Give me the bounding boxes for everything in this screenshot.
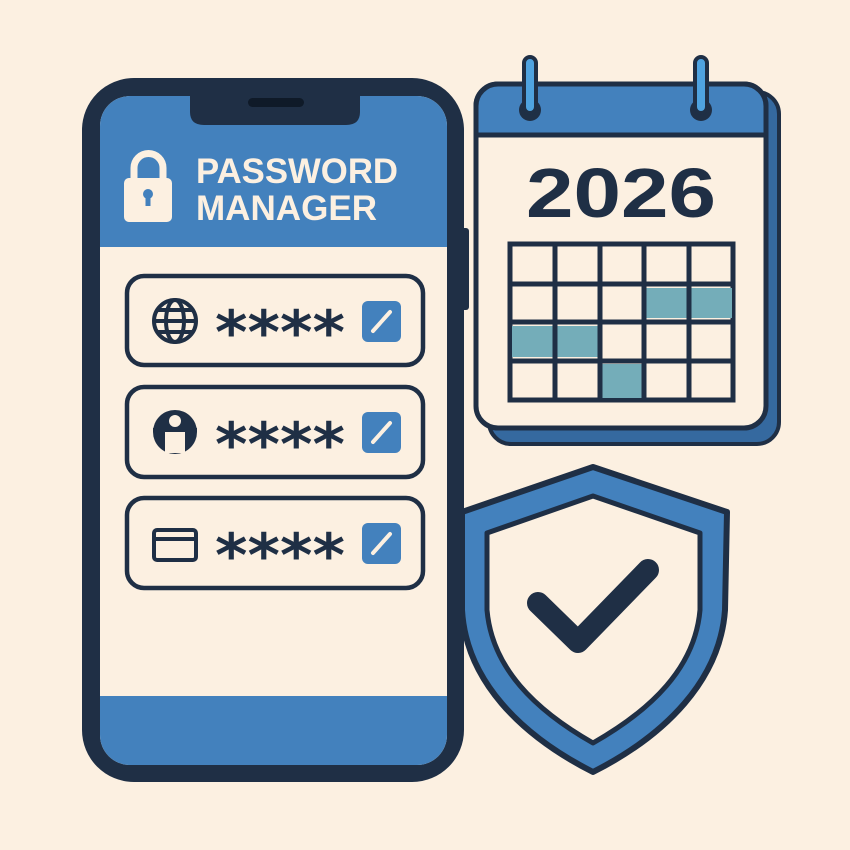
card: credit card (127, 498, 423, 591)
title: PASSWORD (196, 152, 398, 191)
shield (462, 467, 727, 772)
phone header (100, 96, 447, 247)
card: account: **** (215, 410, 345, 480)
notch (190, 96, 360, 125)
card: credit card: **** (215, 521, 345, 591)
calendar (476, 57, 779, 444)
phone header: MANAGER (196, 189, 377, 228)
card: website (127, 276, 423, 368)
icon: lock (124, 154, 172, 222)
rings (519, 57, 712, 121)
icon: check mark (538, 570, 648, 642)
card: website: **** (215, 298, 345, 368)
year: 2026 (526, 154, 716, 232)
calendar grid (510, 244, 733, 400)
bottom bar (100, 696, 447, 765)
card: account (127, 387, 423, 480)
phone (82, 78, 469, 782)
